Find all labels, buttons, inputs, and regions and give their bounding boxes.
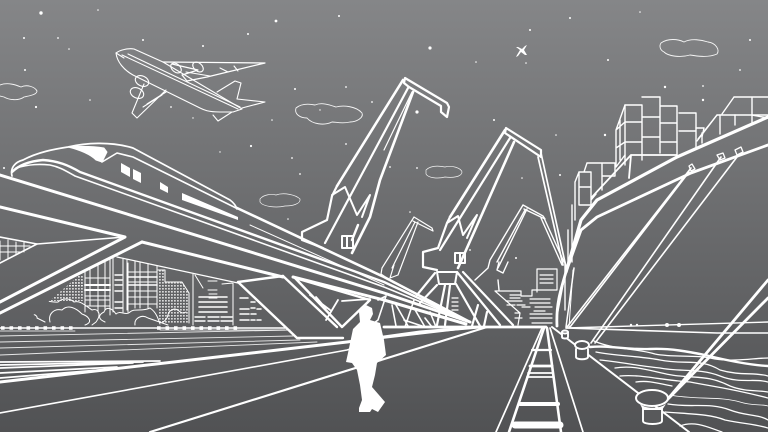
train <box>12 143 470 322</box>
railway <box>496 328 583 432</box>
ship mooring lines <box>567 147 743 343</box>
building D <box>193 272 233 325</box>
person silhouette <box>346 305 386 412</box>
quay edge <box>552 327 689 432</box>
airplane <box>116 49 265 121</box>
trees <box>34 298 186 326</box>
elevated bridge deck <box>0 175 470 324</box>
crane: center <box>417 128 566 326</box>
far shore right <box>566 322 768 333</box>
containers on ship <box>565 97 768 310</box>
bridge piers <box>238 276 436 338</box>
clouds <box>0 40 718 207</box>
bridge lower thin edge <box>117 257 238 283</box>
mooring lines to bollard <box>664 280 768 403</box>
crane: far small right <box>475 205 564 290</box>
stars <box>3 9 751 259</box>
building E <box>240 298 261 320</box>
tower A <box>85 252 127 315</box>
shore: left water and promenade <box>0 328 317 378</box>
road <box>0 327 546 432</box>
low left block <box>36 283 47 305</box>
tower C <box>128 255 157 312</box>
city: left skyline <box>34 258 234 326</box>
icon: small distant plane <box>516 45 527 57</box>
crane: main <box>302 78 449 253</box>
crane: far small left <box>381 217 433 283</box>
city: right of rails <box>452 269 557 325</box>
tower B <box>115 275 122 308</box>
bollards <box>562 330 668 424</box>
ship hull <box>557 117 768 327</box>
water waves <box>590 341 768 432</box>
dotted buildings <box>48 270 189 323</box>
